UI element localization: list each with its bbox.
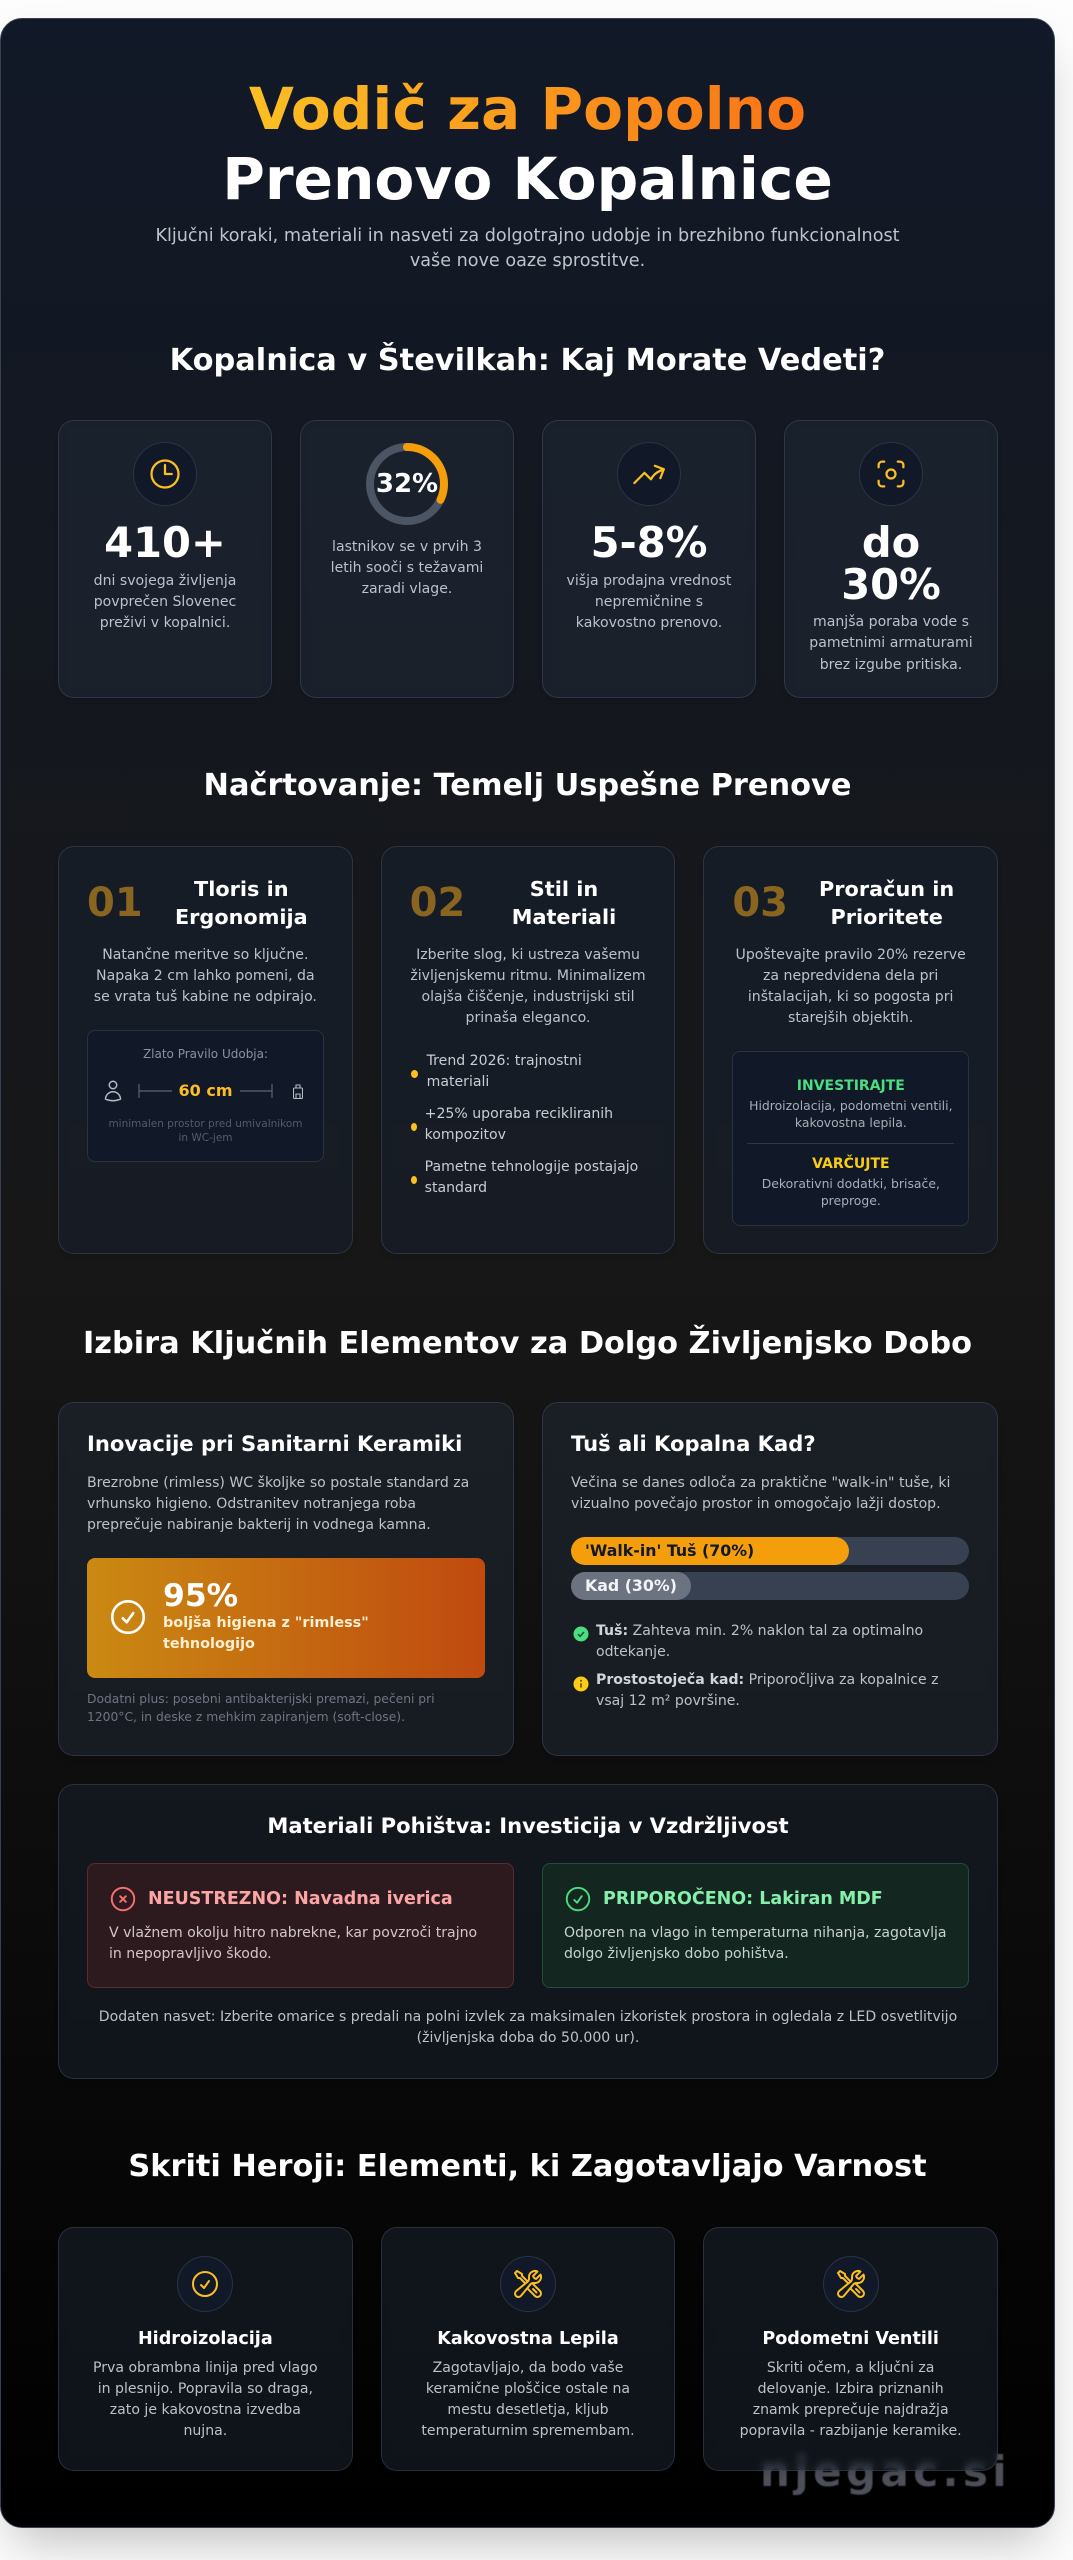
comparison: recommended: [542, 1863, 969, 1988]
list item: [425, 1106, 613, 1143]
stat number: [841, 518, 941, 609]
panel text: Večina se danes odloča za praktične "walk-in" tuše, ki: [571, 1475, 950, 1491]
card text: keramične ploščice ostale na: [426, 2381, 630, 2397]
divider: [747, 1143, 954, 1144]
trend list: [411, 1053, 638, 1196]
bullet: [411, 1176, 417, 1184]
comparison text: Odporen na vlago in temperaturna nihanja, zagotavlja: [564, 1925, 947, 1941]
step text: starejših objektih.: [788, 1010, 913, 1026]
step text: Upoštevajte pravilo 20% rezerve: [736, 947, 966, 963]
panel text: [571, 1475, 950, 1512]
step text: [736, 947, 966, 1026]
card text: znamk preprečuje najdražja: [753, 2402, 949, 2418]
note: shower: [596, 1623, 923, 1660]
list item: Pametne tehnologije postajajo: [425, 1159, 638, 1175]
icon: clock: [133, 442, 197, 506]
step header: [732, 877, 954, 929]
panel heading: Tuš ali Kopalna Kad?: [571, 1431, 816, 1456]
bar fill 30%: [571, 1572, 691, 1600]
heading: key elements: Izbira Ključnih Elementov za Dolgo Življenjsko Dobo: [83, 1326, 972, 1361]
step header: Tloris in: [194, 877, 289, 901]
subtitle: Ključni koraki, materiali in nasveti za dolgotrajno udobje in brezhibno funkcionalnost: [155, 226, 900, 246]
step header: Ergonomija: [175, 905, 308, 929]
icon: trending up: [617, 442, 681, 506]
icon: check circle: [566, 1886, 590, 1912]
panel footnote: 1200°C, in deske z mehkim zapiranjem (soft-close).: [87, 1710, 405, 1724]
list item: standard: [425, 1180, 487, 1196]
comparison text: dolgo življenjsko dobo pohištva.: [564, 1946, 789, 1962]
hero card: waterproofing: [58, 2227, 353, 2471]
stat description: višja prodajna vrednost: [567, 573, 731, 589]
step text: za nepredvidena dela pri: [763, 968, 938, 984]
card text: Zagotavljajo, da bodo vaše: [433, 2360, 623, 2376]
extra tip: (življenjska doba do 50.000 ur).: [417, 2030, 639, 2046]
box caption: minimalen prostor pred umivalnikom: [108, 1118, 303, 1130]
stat description: manjša poraba vode s: [813, 614, 969, 630]
panel text: vizualno povečajo prostor in omogočajo lažji dostop.: [571, 1496, 941, 1512]
icon: bottle: [293, 1084, 303, 1099]
step text: življenjskemu ritmu. Minimalizem: [410, 968, 646, 984]
panel text: preprečuje nabiranje bakterij in vodnega kamna.: [87, 1517, 431, 1533]
comparison: unsuitable: [87, 1863, 514, 1988]
stat card: do 30%: [784, 420, 998, 698]
heading: hidden heroes: Skriti Heroji: Elementi, ki Zagotavljajo Varnost: [128, 2149, 927, 2184]
title: [222, 75, 833, 213]
icon: tools: [500, 2256, 556, 2312]
callout text: boljša higiena z "rimless": [163, 1615, 369, 1631]
title: Prenovo Kopalnice: [222, 145, 833, 213]
box caption: in WC-jem: [178, 1132, 233, 1144]
card text: delovanje. Izbira priznanih: [758, 2381, 944, 2397]
note: bathtub: [596, 1672, 938, 1709]
comparison text: [109, 1925, 477, 1962]
hero card: concealed valves: [703, 2227, 998, 2471]
step header: 01: [87, 880, 143, 926]
stat description: lastnikov se v prvih 3: [332, 539, 482, 555]
step text: prinaša eleganco.: [466, 1010, 590, 1026]
stat description: kakovostno prenovo.: [576, 615, 722, 631]
stat number: 5-8%: [591, 518, 707, 567]
step text: se vrata tuš kabine ne odpirajo.: [94, 989, 317, 1005]
stat description: povprečen Slovenec: [94, 594, 236, 610]
panel heading: Inovacije pri Sanitarni Keramiki: [87, 1431, 462, 1456]
step text: [410, 947, 646, 1026]
bullet: [411, 1123, 417, 1131]
stat description: brez izgube pritiska.: [820, 656, 962, 672]
comparison text: in nepopravljivo škodo.: [109, 1946, 272, 1962]
step header: 02: [410, 880, 465, 926]
heading: planning: Načrtovanje: Temelj Uspešne Prenove: [204, 768, 851, 803]
step text: Natančne meritve so ključne.: [102, 947, 308, 963]
stat description: letih sooči s težavami: [331, 560, 483, 576]
box caption: [108, 1118, 303, 1144]
stat description: zaradi vlage.: [362, 581, 452, 597]
stat description: pametnimi armaturami: [809, 635, 973, 651]
dimension value: 60 cm: [178, 1080, 232, 1100]
comparison heading: NEUSTREZNO: Navadna iverica: [148, 1889, 453, 1909]
card text: [718, 2358, 983, 2443]
step text: inštalacijah, ki so pogosta pri: [748, 989, 953, 1005]
list item: kompozitov: [425, 1127, 506, 1143]
callout text: tehnologijo: [163, 1636, 255, 1652]
stat number: 30%: [841, 560, 941, 609]
donut chart: 32%: 32%: [376, 469, 438, 499]
invest text: Hidroizolacija, podometni ventili,: [749, 1098, 953, 1113]
step header: Stil in: [530, 877, 598, 901]
note: shower: odtekanje.: [596, 1644, 670, 1660]
stat card: 410+: [58, 420, 272, 698]
icon: yellow info: [574, 1676, 588, 1692]
title: Vodič za Popolno: [249, 75, 806, 143]
panel: plan 03: [703, 846, 998, 1254]
card heading: Kakovostna Lepila: [437, 2329, 619, 2349]
stat description: preživi v kopalnici.: [100, 615, 230, 631]
bar fill 70%: [571, 1537, 849, 1565]
card text: in plesnijo. Popravila so draga,: [98, 2381, 313, 2397]
step text: Napaka 2 cm lahko pomeni, da: [96, 968, 315, 984]
stat description: nepremičnine s: [595, 594, 703, 610]
donut chart: 32%: [366, 443, 448, 525]
list item: Trend 2026: trajnostni: [427, 1053, 582, 1069]
panel text: Brezrobne (rimless) WC školjke so postale standard za: [87, 1475, 469, 1491]
bar: bathtub: [571, 1572, 969, 1600]
panel: plan 01: [58, 846, 353, 1254]
highlight callout: 95%: [87, 1558, 485, 1678]
step header: Prioritete: [830, 905, 943, 929]
subtitle: vaše nove oaze sprostitve.: [410, 250, 645, 270]
step header: Proračun in: [819, 877, 954, 901]
hero card: adhesives: [381, 2227, 675, 2471]
bar fill 70%: 'Walk-in' Tuš (70%): [585, 1541, 754, 1560]
card text: popravila - razbijanje keramike.: [740, 2423, 962, 2439]
icon: x circle: [110, 1886, 136, 1912]
stat description: [809, 614, 973, 672]
list item: [426, 1053, 582, 1090]
note: bathtub: vsaj 12 m² površine.: [596, 1693, 740, 1709]
invest text: kakovostna lepila.: [795, 1115, 907, 1130]
panel: plan 02: [381, 846, 675, 1254]
stat card: 32%: [300, 420, 514, 698]
step header: [410, 877, 616, 929]
heading: statistics: Kopalnica v Številkah: Kaj Morate Vedeti?: [170, 343, 885, 378]
card text: Skriti očem, a ključni za: [767, 2360, 934, 2376]
step text: [94, 947, 317, 1005]
box label: Zlato Pravilo Udobja:: [143, 1046, 268, 1060]
card text: [93, 2360, 318, 2439]
comparison text: V vlažnem okolju hitro nabrekne, kar povzroči trajno: [109, 1925, 477, 1941]
save text: [762, 1176, 940, 1208]
step text: Izberite slog, ki ustreza vašemu: [416, 947, 640, 963]
save text: preproge.: [821, 1193, 881, 1208]
save text: Dekorativni dodatki, brisače,: [762, 1176, 940, 1191]
list item: materiali: [427, 1074, 489, 1090]
icon: green check: [574, 1626, 588, 1642]
card text: zato je kakovostna izvedba: [110, 2402, 301, 2418]
invest label: INVESTIRAJTE: [797, 1078, 905, 1094]
step header: Materiali: [512, 905, 616, 929]
subtitle: [155, 226, 900, 270]
icon: tools: [823, 2256, 879, 2312]
panel footnote: Dodatni plus: posebni antibakterijski premazi, pečeni pri: [87, 1692, 435, 1706]
stat number: do: [862, 518, 920, 567]
panel heading: Materiali Pohištva: Investicija v Vzdržljivost: [267, 1813, 789, 1838]
stat description: [331, 539, 483, 597]
comparison heading: PRIPOROČENO: Lakiran MDF: [603, 1889, 883, 1909]
panel: sanitary ceramics: [58, 1402, 514, 1756]
invest text: [749, 1098, 953, 1130]
dimension line: [138, 1084, 273, 1098]
extra tip: [99, 2009, 957, 2046]
extra tip: Dodaten nasvet: Izberite omarice s predali na polni izvlek za maksimalen izkoristek prostora in ogledala z LED osvetlitvijo: [99, 2009, 957, 2025]
callout number: 95%: [163, 1578, 238, 1614]
step header: 03: [732, 880, 788, 926]
card text: Prva obrambna linija pred vlago: [93, 2360, 318, 2376]
panel: furniture materials: [58, 1784, 998, 2079]
golden rule box: [87, 1030, 324, 1162]
card heading: Hidroizolacija: [138, 2329, 273, 2349]
card text: [421, 2360, 635, 2439]
list item: +25% uporaba recikliranih: [425, 1106, 613, 1122]
card text: nujna.: [183, 2423, 227, 2439]
stat number: 410+: [104, 518, 226, 567]
note: shower: Tuš: Zahteva min. 2% naklon tal za optimalno: [596, 1623, 923, 1639]
bullet: [411, 1070, 418, 1078]
stat card: 5-8%: [542, 420, 756, 698]
panel: shower vs bath: [542, 1402, 998, 1756]
icon: viewfinder: [859, 442, 923, 506]
note: bathtub: Prostostoječa kad: Priporočljiva za kopalnice z: [596, 1672, 938, 1688]
step header: [87, 877, 308, 929]
icon: check circle: [177, 2256, 233, 2312]
card text: mestu desetletja, kljub: [447, 2402, 609, 2418]
comparison text: [564, 1925, 947, 1962]
stat description: dni svojega življenja: [94, 573, 236, 589]
card text: temperaturnim spremembam.: [421, 2423, 635, 2439]
panel footnote: [87, 1692, 435, 1724]
save label: VARČUJTE: [812, 1156, 890, 1172]
priorities box: [732, 1051, 969, 1226]
icon: person: [104, 1080, 122, 1102]
stat description: [567, 573, 732, 631]
panel text: vrhunsko higieno. Odstranitev notranjega roba: [87, 1496, 416, 1512]
bar: walk-in shower: [571, 1537, 969, 1565]
step text: olajša čiščenje, industrijski stil: [421, 989, 634, 1005]
stat description: [94, 573, 236, 631]
icon: check circle: [110, 1600, 146, 1634]
bar fill 30%: Kad (30%): [585, 1576, 677, 1595]
panel text: [87, 1475, 469, 1533]
callout text: [163, 1615, 369, 1652]
card heading: Podometni Ventili: [762, 2329, 939, 2349]
list item: [425, 1159, 638, 1196]
watermark: njegac.si: [760, 2447, 1011, 2496]
